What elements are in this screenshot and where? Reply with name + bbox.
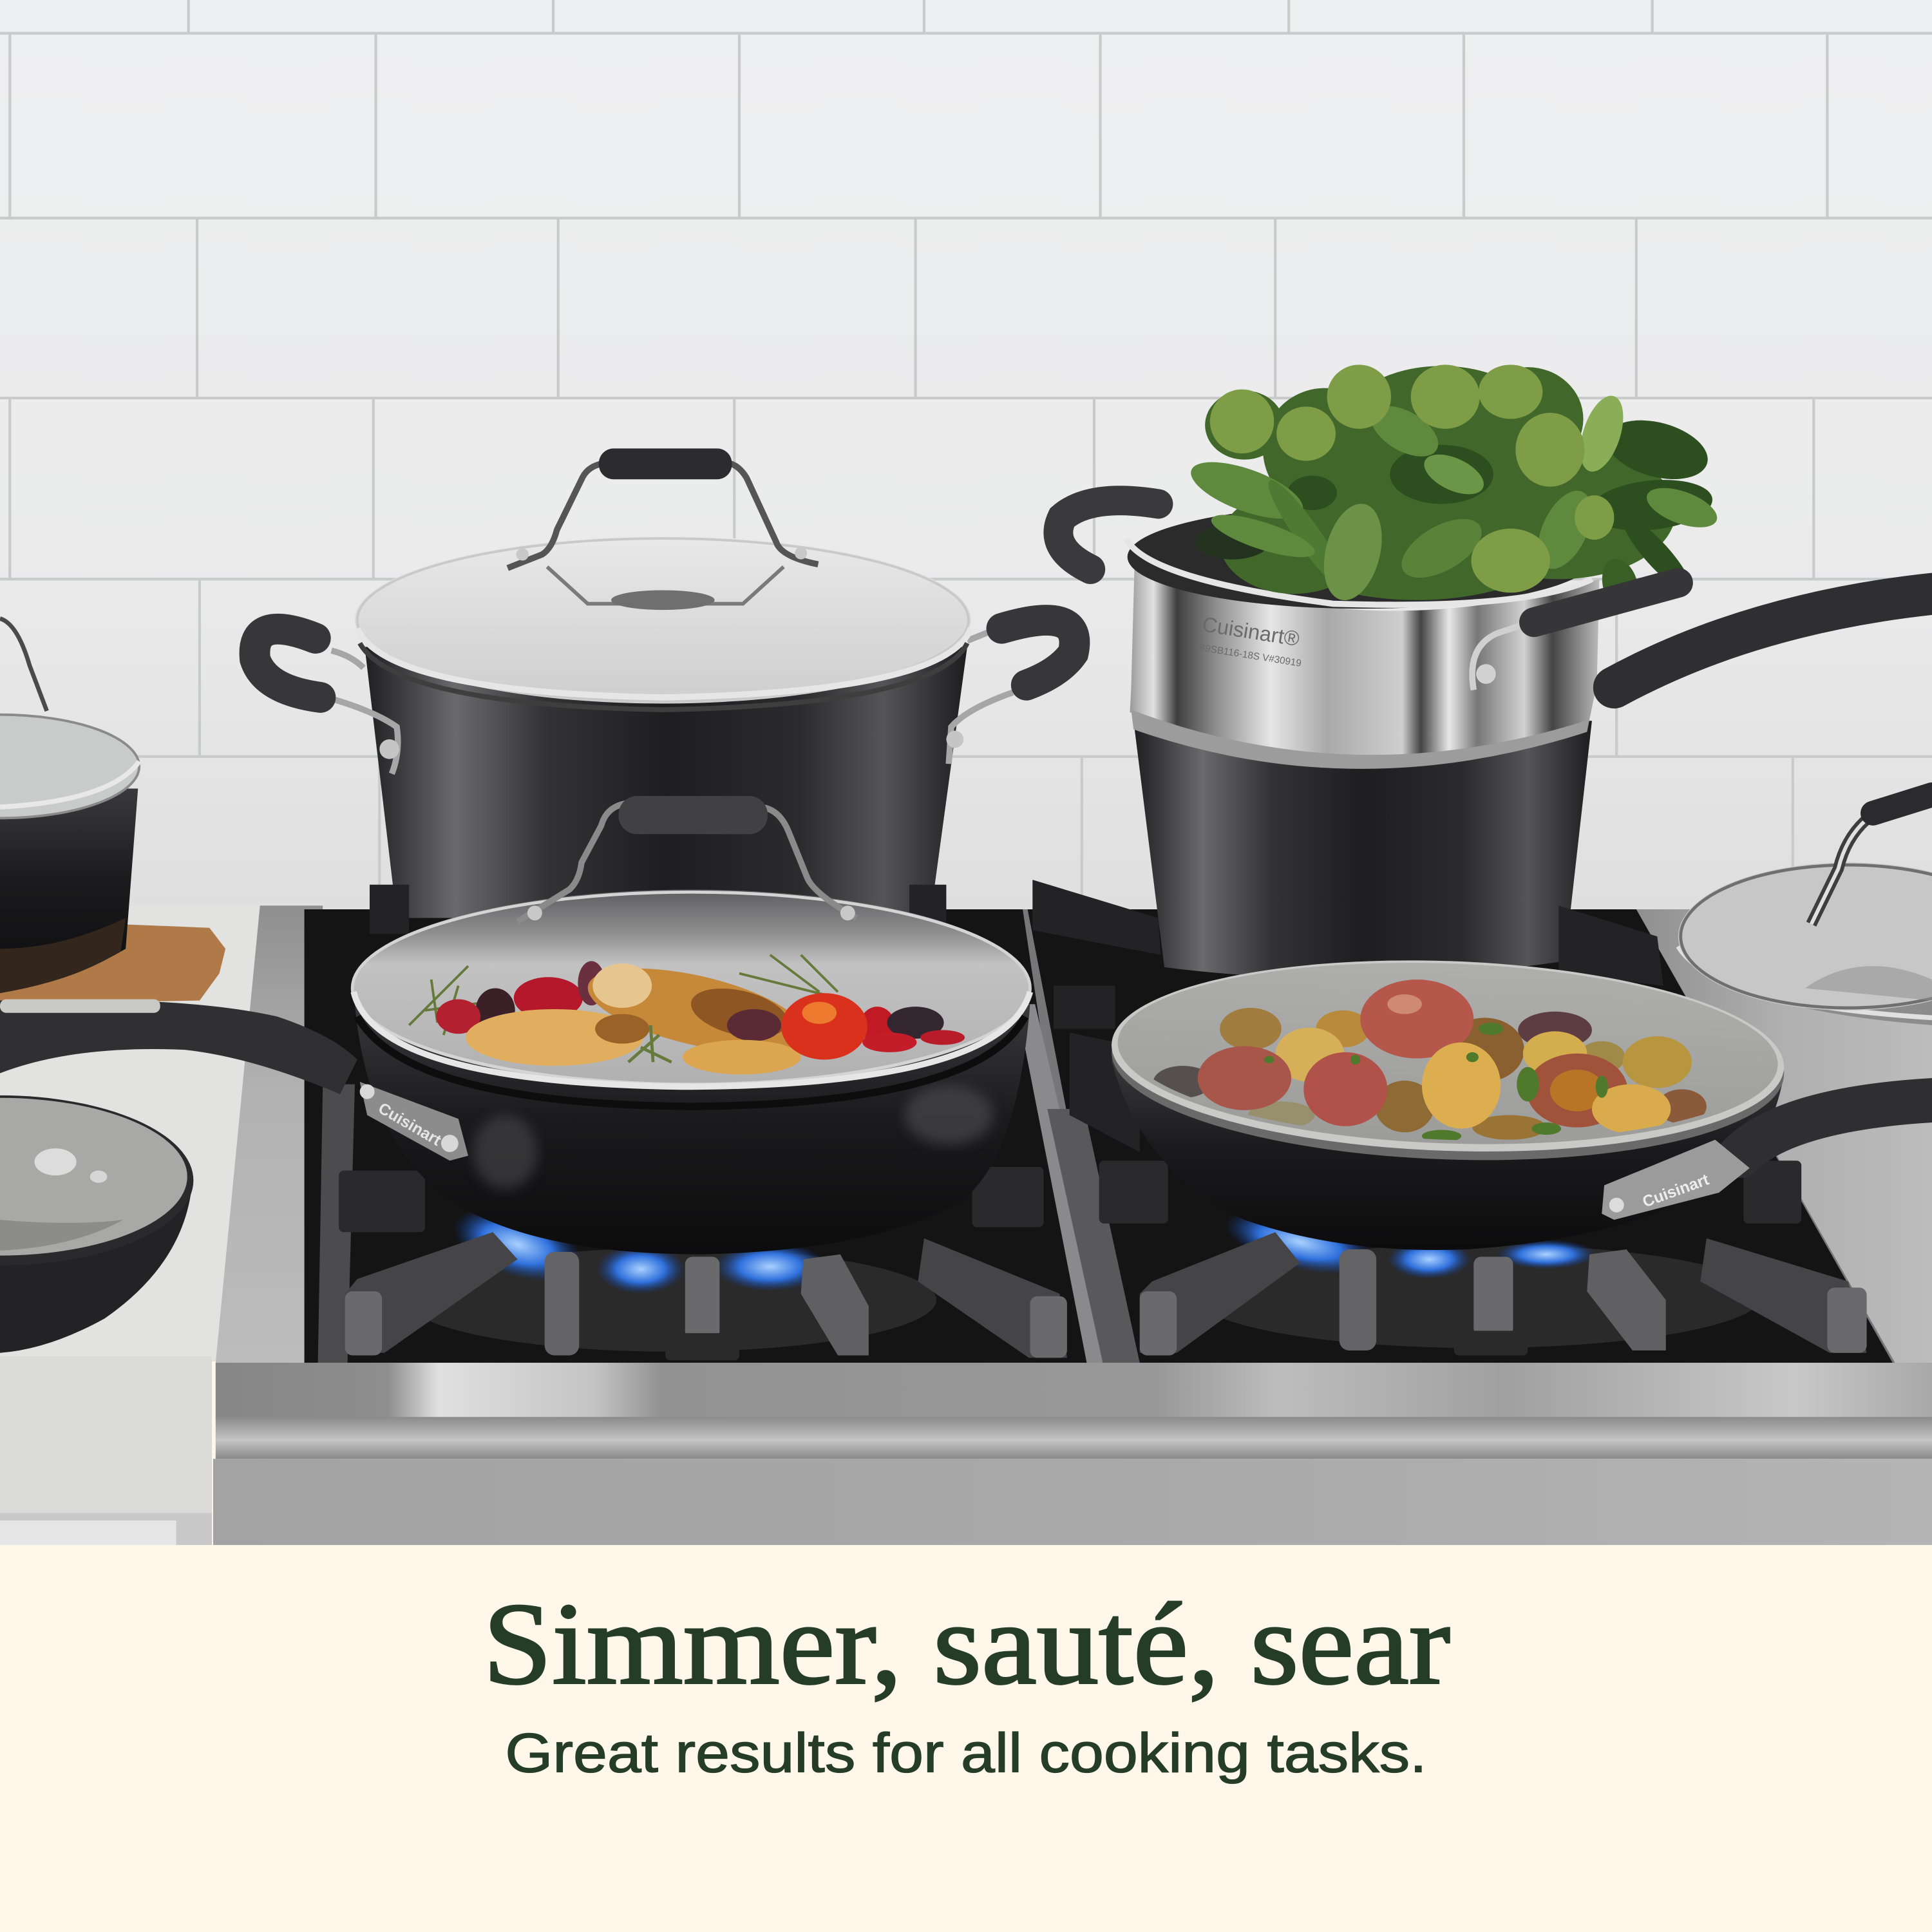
skillet long handle	[1740, 1101, 1932, 1156]
stock pot left loop handle	[255, 629, 399, 774]
front-right ceramic skillet	[1108, 949, 1932, 1250]
skillet body	[1112, 1059, 1784, 1250]
saute pan lid handle	[518, 796, 857, 922]
left burner flame	[444, 1193, 827, 1296]
left burner well	[305, 909, 1090, 1363]
roasted potatoes and herbs	[1153, 980, 1707, 1142]
back-right black saucepan	[1133, 721, 1592, 978]
left burner grate	[345, 1232, 1067, 1360]
steamer engraving	[1198, 612, 1307, 669]
right burner well	[1028, 909, 1893, 1363]
saute pan lid rim	[352, 892, 1030, 1084]
heading: Simmer, sauté, sear	[483, 1580, 1450, 1709]
background: white subway tile wall	[0, 0, 1932, 936]
skillet silver band	[1108, 956, 1787, 1171]
skillet rivet plate	[1602, 1140, 1750, 1220]
steamer engraving: Cuisinart®	[1200, 612, 1301, 650]
stock pot glass lid	[355, 536, 971, 710]
saute pan rivet plate: Cuisinart	[375, 1099, 444, 1150]
left countertop	[0, 905, 261, 1545]
saucepan long handle	[1614, 594, 1932, 688]
right burner grate	[1140, 1232, 1867, 1356]
steamer lower dish rim	[1131, 710, 1589, 769]
back-left stock pot	[255, 448, 1074, 918]
bottom caption panel	[0, 1545, 1932, 1932]
left partial pot on cutting board	[0, 618, 225, 1004]
saute pan long handle	[0, 999, 357, 1094]
stock pot body	[365, 647, 967, 918]
stove front rail	[213, 1363, 1932, 1545]
left burner ring and grate bars	[339, 1167, 1044, 1352]
right stainless deck	[1636, 909, 1932, 1363]
steamer near loop handle	[1472, 583, 1678, 690]
stove deck and burner well	[216, 905, 1932, 1365]
skillet rim	[1108, 949, 1787, 1162]
chicken, tomatoes and olives	[409, 952, 965, 1074]
stock pot right loop handle	[946, 620, 1074, 764]
steamer engraving: S9SB116-18S V#30919	[1198, 642, 1302, 669]
saute pan rivet plate	[360, 1082, 468, 1160]
glass lid interior	[351, 889, 1031, 1087]
steamer body	[1130, 554, 1599, 759]
steel steamer insert with greens	[1058, 365, 1932, 769]
broccoli rabe greens	[1184, 365, 1722, 616]
right spare glass lid	[1678, 795, 1932, 1025]
saute pan body	[355, 1004, 1030, 1255]
right burner ring and grate bars	[1099, 1160, 1801, 1348]
subheading: Great results for all cooking tasks.	[505, 1722, 1427, 1784]
skillet ceramic interior	[1115, 952, 1781, 1155]
back burner grates	[370, 880, 1663, 1152]
right burner flame	[1219, 1197, 1596, 1287]
steamer rim	[1128, 505, 1596, 609]
stock pot lid handle	[507, 448, 818, 568]
bottom-left partial ceramic pan	[0, 1095, 193, 1353]
front-left covered saute pan	[0, 796, 1031, 1255]
skillet rivet plate: Cuisinart	[1640, 1170, 1712, 1211]
steamer far handle	[1058, 500, 1158, 569]
left stainless strip	[216, 905, 323, 1363]
